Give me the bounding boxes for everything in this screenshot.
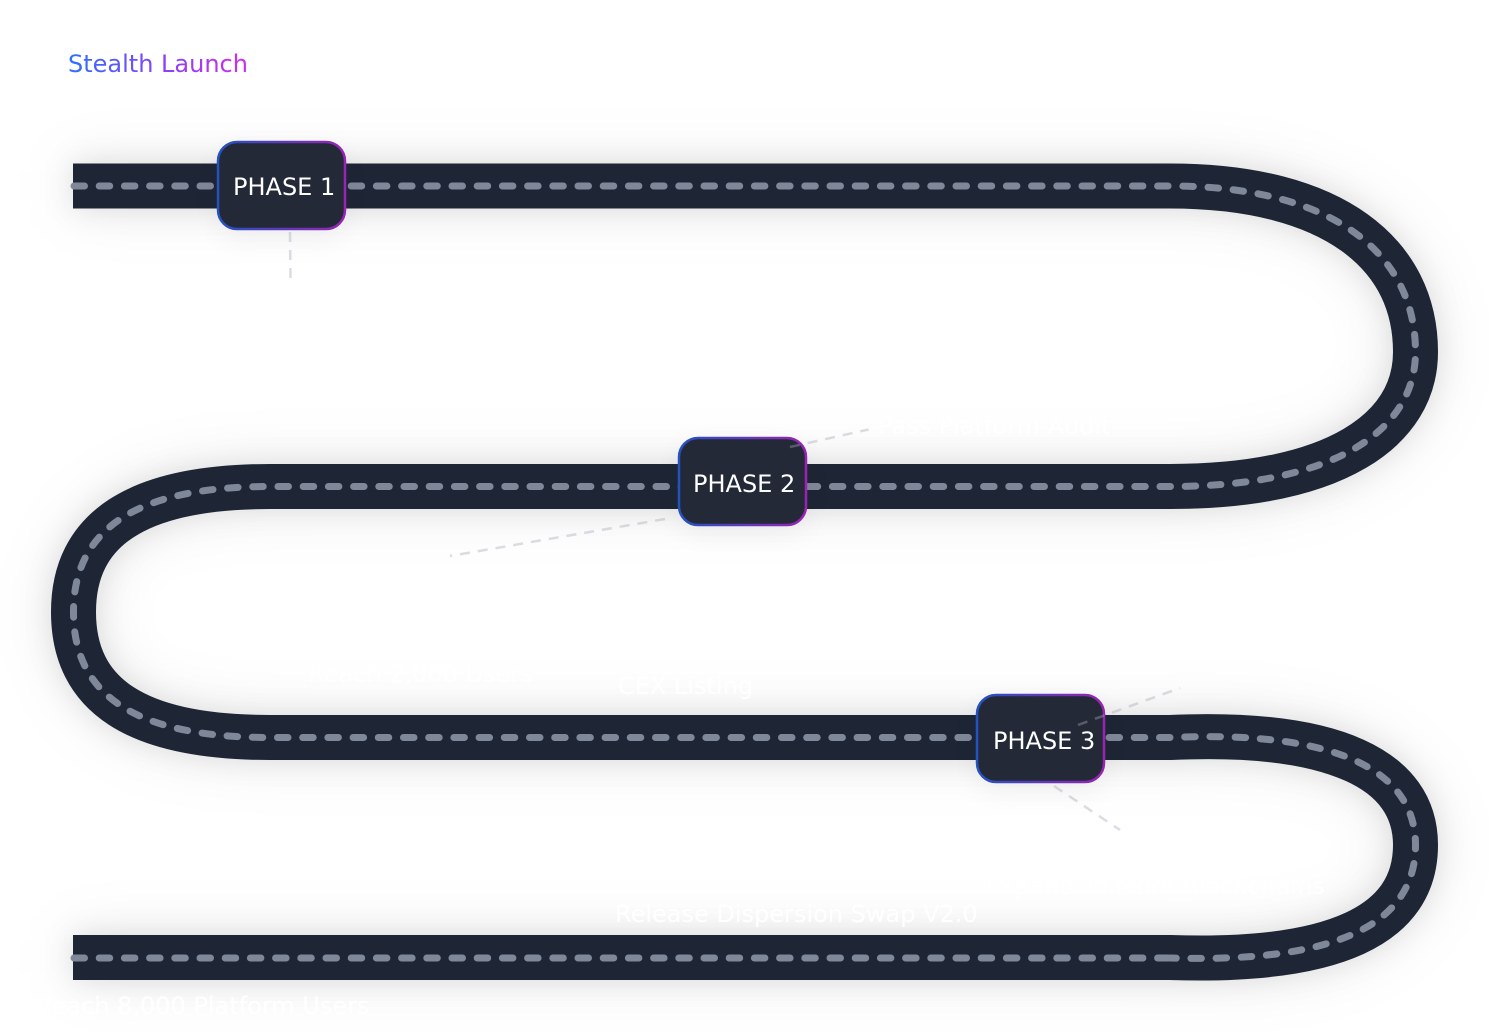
milestone label: Expand To More Blockchains: Expand To More Blockchains — [985, 872, 1325, 900]
phase 3 badge: PHASE 3 — [993, 727, 1095, 755]
road — [73, 186, 1416, 958]
connector: phase 3 upper — [1078, 688, 1180, 725]
phase 2 badge — [679, 438, 806, 534]
phase 1 badge: PHASE 1 — [233, 173, 335, 201]
phase 3 badge — [977, 695, 1104, 791]
connector: phase 2 to Pass Platform Audit — [790, 430, 868, 447]
road shadow — [73, 186, 1416, 958]
road centre dashes — [74, 186, 1416, 958]
milestone label: Release Dispersion Swap V2.0: Release Dispersion Swap V2.0 — [615, 900, 978, 928]
milestone label: Reach 8,000 Platform Users: Reach 8,000 Platform Users — [36, 992, 370, 1020]
title: Stealth Launch — [68, 50, 248, 78]
connector: phase 1 — [289, 232, 292, 278]
connector: phase 2 to Reach 2,000 Users — [450, 519, 665, 556]
milestone label: Pass Platform Audit: Pass Platform Audit — [878, 412, 1111, 440]
milestone label: CEX Listing: CEX Listing — [618, 672, 753, 700]
phase 2 badge: PHASE 2 — [693, 470, 795, 498]
connector: phase 3 lower — [1054, 786, 1120, 830]
road wide halo — [73, 186, 1416, 958]
phase 1 badge — [218, 142, 345, 238]
milestone label: Reach 2,000 Users: Reach 2,000 Users — [308, 660, 533, 688]
